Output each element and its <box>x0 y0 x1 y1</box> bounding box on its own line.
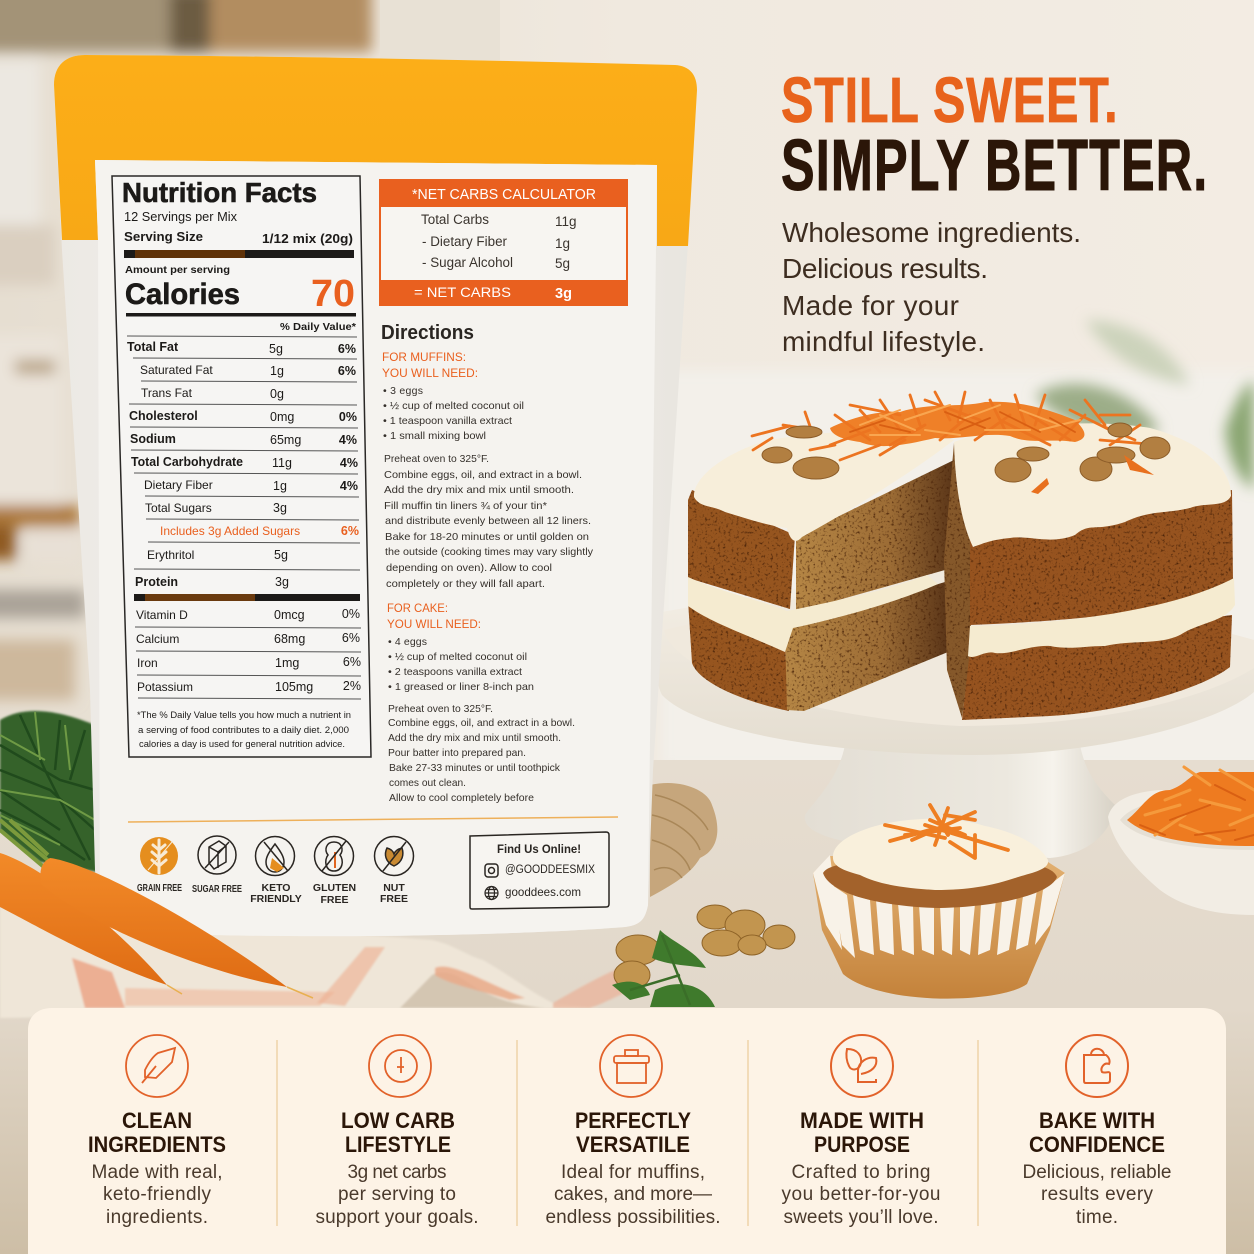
net carbs calculator: 11g <box>555 214 577 229</box>
nutrition facts panel: Total Sugars <box>145 501 212 515</box>
nutrition facts panel: 65mg <box>270 433 301 447</box>
nutrition facts panel: 1g <box>270 364 284 378</box>
nutrition facts panel: 0g <box>270 387 284 401</box>
bag body <box>54 55 697 936</box>
directions: Combine eggs, oil, and extract in a bowl. <box>388 717 575 729</box>
icon: leaf <box>126 1035 188 1097</box>
intro paragraph <box>782 217 1081 357</box>
directions: Fill muffin tin liners ¾ of your tin* <box>384 500 547 512</box>
filling <box>968 578 1235 657</box>
badge: gluten free: GLUTEN <box>313 882 356 894</box>
liner pleats <box>813 855 1065 958</box>
bowl of shredded carrots <box>1108 767 1254 915</box>
panel: benefits <box>28 1008 1226 1254</box>
nutrition facts panel: 5g <box>269 342 283 356</box>
frosting <box>694 432 954 541</box>
headline <box>781 66 1207 206</box>
nutrition facts panel: 5g <box>274 548 288 562</box>
pedestal <box>805 745 1115 858</box>
net carbs calculator: 3g <box>555 286 572 302</box>
icon: globe <box>485 886 498 900</box>
badge: nut free <box>374 836 414 905</box>
benefit: made with purpose: PURPOSE <box>814 1132 910 1157</box>
directions: Allow to cool completely before <box>389 792 534 804</box>
nutrition facts panel: Nutrition Facts <box>122 177 317 208</box>
headline: STILL SWEET. <box>781 66 1118 137</box>
benefit: bake with confidence: BAKE WITH <box>1039 1108 1155 1133</box>
walnuts on counter <box>614 905 795 989</box>
directions: Pour batter into prepared pan. <box>388 747 526 759</box>
net carbs calculator: 1g <box>555 236 570 251</box>
benefit: made with purpose <box>782 1035 940 1228</box>
intro paragraph: Wholesome ingredients. <box>782 217 1081 248</box>
badge: keto friendly: KETO <box>262 882 290 894</box>
directions: • 4 eggs <box>388 636 427 648</box>
nutrition facts panel: Potassium <box>137 680 193 694</box>
directions: comes out clean. <box>389 777 466 789</box>
badge: nut free: FREE <box>380 893 408 905</box>
nutrition facts panel: 0mcg <box>274 608 305 622</box>
net carbs calculator: = NET CARBS <box>414 284 511 300</box>
benefit: made with purpose: you better-for-you <box>782 1184 940 1205</box>
find us online box <box>470 832 609 909</box>
directions: Add the dry mix and mix until smooth. <box>384 484 574 496</box>
plate <box>656 560 1254 755</box>
benefit: perfectly versatile: Ideal for muffins, <box>561 1162 705 1183</box>
shredded carrot topping <box>752 392 1160 460</box>
walnuts on cake <box>762 423 1170 482</box>
directions: Add the dry mix and mix until smooth. <box>388 732 561 744</box>
net carbs calculator: - Dietary Fiber <box>422 234 508 249</box>
nutrition facts panel: 12 Servings per Mix <box>124 210 238 224</box>
directions: and distribute evenly between all 12 liners. <box>385 515 591 527</box>
cake stand <box>656 560 1254 858</box>
benefit: clean ingredients: ingredients. <box>106 1207 208 1228</box>
icon: sprout <box>831 1035 893 1097</box>
frosting <box>954 423 1231 547</box>
right cake wedge <box>944 423 1235 720</box>
nutrition facts panel: Cholesterol <box>129 409 198 423</box>
nutrition facts panel: 1mg <box>275 656 299 670</box>
intro paragraph: Made for your <box>782 290 959 321</box>
white label panel <box>95 160 657 936</box>
directions: YOU WILL NEED: <box>387 619 481 631</box>
nutrition facts panel: 0mg <box>270 410 294 424</box>
directions: Preheat oven to 325°F. <box>384 453 489 465</box>
nutrition facts panel: 0% <box>342 607 360 621</box>
find us online box: Find Us Online! <box>497 842 581 856</box>
nutrition facts panel: 70 <box>311 273 355 315</box>
directions: Directions <box>381 322 474 344</box>
nutrition facts panel: Protein <box>135 575 178 589</box>
nutrition facts panel: 4% <box>340 479 358 493</box>
badge: gluten free: FREE <box>320 894 349 906</box>
badge: keto friendly <box>250 836 302 905</box>
lower layer <box>962 615 1232 720</box>
benefit: bake with confidence: time. <box>1076 1207 1118 1228</box>
nutrition facts panel <box>112 176 371 757</box>
benefit: clean ingredients: CLEAN <box>122 1108 192 1133</box>
left cake wedge <box>688 432 954 711</box>
upper outer crust <box>688 490 795 609</box>
carrot stems <box>0 820 50 868</box>
net carbs calculator: *NET CARBS CALCULATOR <box>412 187 596 203</box>
benefit: made with purpose: sweets you’ll love. <box>784 1207 938 1228</box>
diet badges <box>137 836 414 906</box>
nutrition facts panel: 3g <box>273 501 287 515</box>
nutrition facts panel: Saturated Fat <box>140 363 213 377</box>
net carbs calculator: Total Carbs <box>421 212 489 227</box>
nutrition facts panel: Erythritol <box>147 548 194 562</box>
nutrition facts panel: 2% <box>343 679 361 693</box>
directions: • 1 teaspoon vanilla extract <box>383 415 512 427</box>
directions: the outside (cooking times may vary slightly <box>385 546 594 558</box>
directions: • 3 eggs <box>383 385 423 397</box>
benefit: made with purpose: MADE WITH <box>800 1108 924 1133</box>
nutrition facts panel: Dietary Fiber <box>144 478 213 492</box>
lower cut face <box>785 582 948 711</box>
badge: grain free: GRAIN FREE <box>137 882 182 894</box>
blurred plant <box>1035 320 1254 490</box>
nutrition facts panel: Amount per serving <box>125 264 230 276</box>
nutrition facts panel: 3g <box>275 575 289 589</box>
net carbs calculator: - Sugar Alcohol <box>422 255 513 270</box>
carrot cake <box>688 392 1235 720</box>
benefit: perfectly versatile: VERSATILE <box>576 1132 690 1157</box>
cupcake liner <box>813 856 1065 999</box>
nutrition facts panel: Vitamin D <box>136 608 188 622</box>
upper cut face <box>796 460 954 612</box>
towel <box>0 907 640 1018</box>
nutrition facts panel: 4% <box>340 456 358 470</box>
directions: FOR CAKE: <box>387 603 448 615</box>
nutrition facts panel: 1g <box>273 479 287 493</box>
benefit: perfectly versatile: cakes, and more— <box>554 1184 712 1205</box>
nutrition facts panel: Calcium <box>136 632 179 646</box>
cupcake <box>813 805 1065 999</box>
nutrition facts panel: a serving of food contributes to a daily diet. 2,000 <box>138 725 349 735</box>
directions: • ½ cup of melted coconut oil <box>388 651 527 663</box>
benefit: low carb lifestyle: per serving to <box>338 1184 456 1205</box>
benefit: clean ingredients: INGREDIENTS <box>88 1132 226 1157</box>
herb sprig <box>612 930 715 1007</box>
benefit: low carb lifestyle <box>316 1035 478 1228</box>
find us online box: @GOODDEESMIX <box>505 864 595 876</box>
benefit: clean ingredients: Made with real, <box>92 1162 222 1183</box>
badge: nut free: NUT <box>383 882 405 894</box>
nutrition facts panel: Iron <box>137 656 158 670</box>
directions: • ½ cup of melted coconut oil <box>383 400 524 412</box>
nutrition facts panel: 6% <box>338 364 356 378</box>
directions: Bake 27-33 minutes or until toothpick <box>389 762 561 774</box>
directions: • 2 teaspoons vanilla extract <box>388 666 522 678</box>
nutrition facts panel: 4% <box>339 433 357 447</box>
benefit: low carb lifestyle: LIFESTYLE <box>345 1132 451 1157</box>
nutrition facts panel: Sodium <box>130 432 176 446</box>
benefit: bake with confidence: results every <box>1041 1184 1154 1205</box>
net carbs calculator: 5g <box>555 256 570 271</box>
nutrition facts panel: 0% <box>339 410 357 424</box>
carrots <box>0 820 313 998</box>
product bag <box>54 55 697 936</box>
upper layer <box>970 490 1233 625</box>
badge: sugar free: SUGAR FREE <box>192 883 242 895</box>
bag yellow top <box>54 55 697 246</box>
burlap cloth <box>650 783 717 897</box>
icon: clock badge <box>369 1035 431 1097</box>
nutrition facts panel: calories a day is used for general nutrition advice. <box>139 739 345 749</box>
nutrition facts panel: Includes 3g Added Sugars <box>160 524 300 538</box>
benefit: low carb lifestyle: support your goals. <box>316 1207 478 1228</box>
nutrition facts panel: Trans Fat <box>141 386 193 400</box>
directions: • 1 small mixing bowl <box>383 430 486 442</box>
nutrition facts panel: 68mg <box>274 632 305 646</box>
nutrition facts panel: 6% <box>341 524 359 538</box>
benefit: low carb lifestyle: LOW CARB <box>341 1108 455 1133</box>
headline: SIMPLY BETTER. <box>781 126 1207 206</box>
nutrition facts panel: 6% <box>342 631 360 645</box>
badge: keto friendly: FRIENDLY <box>250 893 302 905</box>
nutrition facts panel: Serving Size <box>124 230 203 244</box>
find us online box: gooddees.com <box>505 885 581 899</box>
benefit: bake with confidence: Delicious, reliable <box>1022 1162 1172 1183</box>
nutrition facts panel: 11g <box>272 456 292 470</box>
benefit: perfectly versatile <box>546 1035 720 1228</box>
nutrition facts panel: 1/12 mix (20g) <box>262 232 353 246</box>
benefit: made with purpose: Crafted to bring <box>792 1162 930 1183</box>
nutrition facts panel: Total Carbohydrate <box>131 455 243 469</box>
nutrition facts panel: Calories <box>125 278 240 311</box>
cupcake top <box>823 860 1057 908</box>
directions: • 1 greased or liner 8-inch pan <box>388 681 534 693</box>
cupcake frosting <box>833 819 1048 890</box>
directions: FOR MUFFINS: <box>382 352 466 364</box>
benefit: clean ingredients <box>88 1035 226 1228</box>
badge: grain free <box>137 837 182 894</box>
directions: completely or they will fall apart. <box>386 578 545 590</box>
directions: Preheat oven to 325°F. <box>388 703 493 715</box>
directions: Bake for 18-20 minutes or until golden on <box>385 531 589 543</box>
benefit: bake with confidence <box>1022 1035 1172 1228</box>
nutrition facts panel: 6% <box>343 655 361 669</box>
intro paragraph: Delicious results. <box>782 253 988 284</box>
icon: container <box>600 1035 662 1097</box>
badge: gluten free <box>313 836 356 906</box>
nutrition facts panel: 6% <box>338 342 356 356</box>
intro paragraph: mindful lifestyle. <box>782 326 985 357</box>
benefit: perfectly versatile: endless possibilities. <box>546 1207 720 1228</box>
cut face <box>944 443 973 718</box>
directions: depending on oven). Allow to cool <box>386 562 552 574</box>
divider line on bag <box>128 817 618 822</box>
nutrition facts panel: 105mg <box>275 680 313 694</box>
lower outer crust <box>688 600 789 711</box>
directions: YOU WILL NEED: <box>382 368 478 380</box>
benefit: clean ingredients: keto-friendly <box>103 1184 212 1205</box>
directions: Combine eggs, oil, and extract in a bowl. <box>384 469 582 481</box>
icon: mix bag <box>1066 1035 1128 1097</box>
carrot greens <box>0 711 97 872</box>
nutrition facts panel: Total Fat <box>127 340 179 354</box>
net carbs calculator <box>379 179 627 305</box>
nutrition facts panel: *The % Daily Value tells you how much a nutrient in <box>137 710 351 720</box>
benefit: bake with confidence: CONFIDENCE <box>1029 1132 1165 1157</box>
benefit: perfectly versatile: PERFECTLY <box>575 1108 691 1133</box>
directions <box>381 322 594 804</box>
icon: instagram <box>485 864 498 877</box>
filling <box>688 575 938 652</box>
benefit: low carb lifestyle: 3g net carbs <box>348 1162 446 1183</box>
nutrition facts panel: % Daily Value* <box>280 322 356 333</box>
badge: sugar free <box>192 836 242 895</box>
